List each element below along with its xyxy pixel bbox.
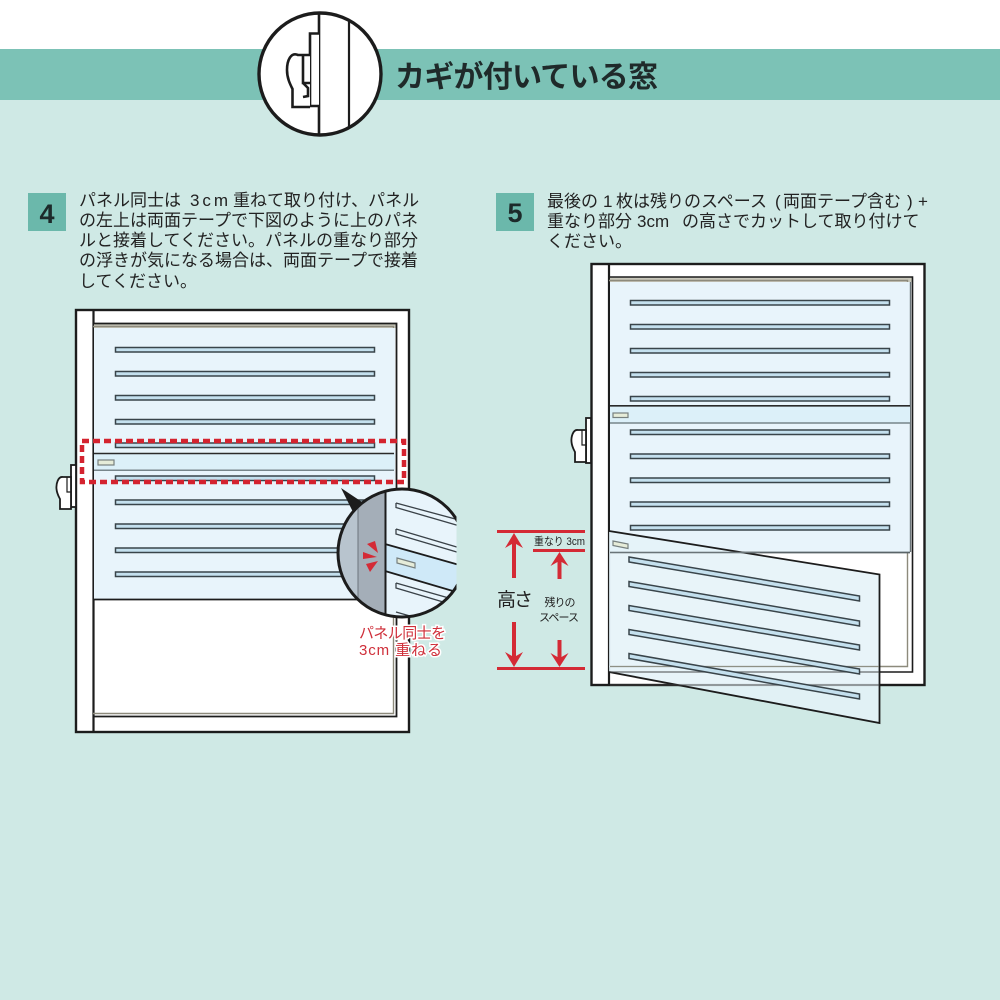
tilted last panel [609,531,880,723]
label: remaining space: 残りの [544,595,576,609]
title: カギが付いている窓 [395,60,658,94]
arrow: full height up [505,533,523,578]
step 5 instructions: 枚は残りのスペース [616,192,767,211]
left window lock [56,465,76,509]
right window diagram [571,264,924,723]
left window frame [76,310,409,732]
step 4 instructions: パネル同士は [79,191,181,210]
step 4 instructions: 重ねて取り付け、パネル [233,191,419,210]
pointer [341,488,362,514]
step 4 instructions: の浮きが気になる場合は、両面テープで接着 [79,251,418,270]
red caption: overlap 3cm [359,625,446,659]
right window frame [592,264,924,685]
header band [0,49,1000,100]
step 5 instructions: ください。 [547,232,632,251]
arrow: remaining space down [550,640,568,667]
label: height: 高さ [497,589,533,611]
step 5 instructions: 3cm [637,212,669,231]
step 5 instructions [547,192,928,251]
step 4 instructions: 3cm [190,191,228,210]
left window panel [94,328,395,600]
step 4 instructions [79,191,419,291]
magnified detail [338,488,470,619]
red caption: overlap 3cm: パネル同士を [359,625,446,642]
label: overlap 3cm: 重なり 3cm [534,534,585,548]
icon: window lock in circle [259,5,381,145]
label: remaining space: スペース [539,612,579,624]
right window lock [571,418,591,463]
label: remaining space [539,595,579,624]
arrow: remaining space up [550,552,568,579]
step 5 instructions: の高さでカットして取り付けて [682,212,920,231]
step 4 instructions: の左上は両面テープで下図のように上のパネ [79,211,418,230]
red caption: overlap 3cm: 3cm 重ねる [359,642,442,659]
arrow: full height down [505,622,523,667]
step 5 instructions: 最後の [547,192,598,211]
step 4 instructions: ルと接着してください。パネルの重なり部分 [79,231,418,250]
left window slats [116,348,374,576]
step 5 instructions: ) [907,192,913,211]
step 5 instructions: 重なり部分 [547,212,632,231]
right window slats [630,300,890,530]
step 5 instructions: 両面テープ含む [783,192,901,211]
step 4 badge [28,193,66,231]
step 5 instructions: 1 [603,192,612,211]
right window installed panel [610,282,910,552]
step 5 badge: 5 [507,198,523,228]
left window diagram [56,310,409,732]
step 4 badge: 4 [39,199,55,229]
red emphasis marks [363,541,378,572]
height dimension lines and arrows [497,530,585,670]
red dashed highlight [82,441,404,482]
step 5 instructions: + [918,192,928,211]
step 4 instructions: してください。 [79,272,197,291]
step 5 instructions: ( [775,192,781,211]
step 5 badge [496,193,534,231]
